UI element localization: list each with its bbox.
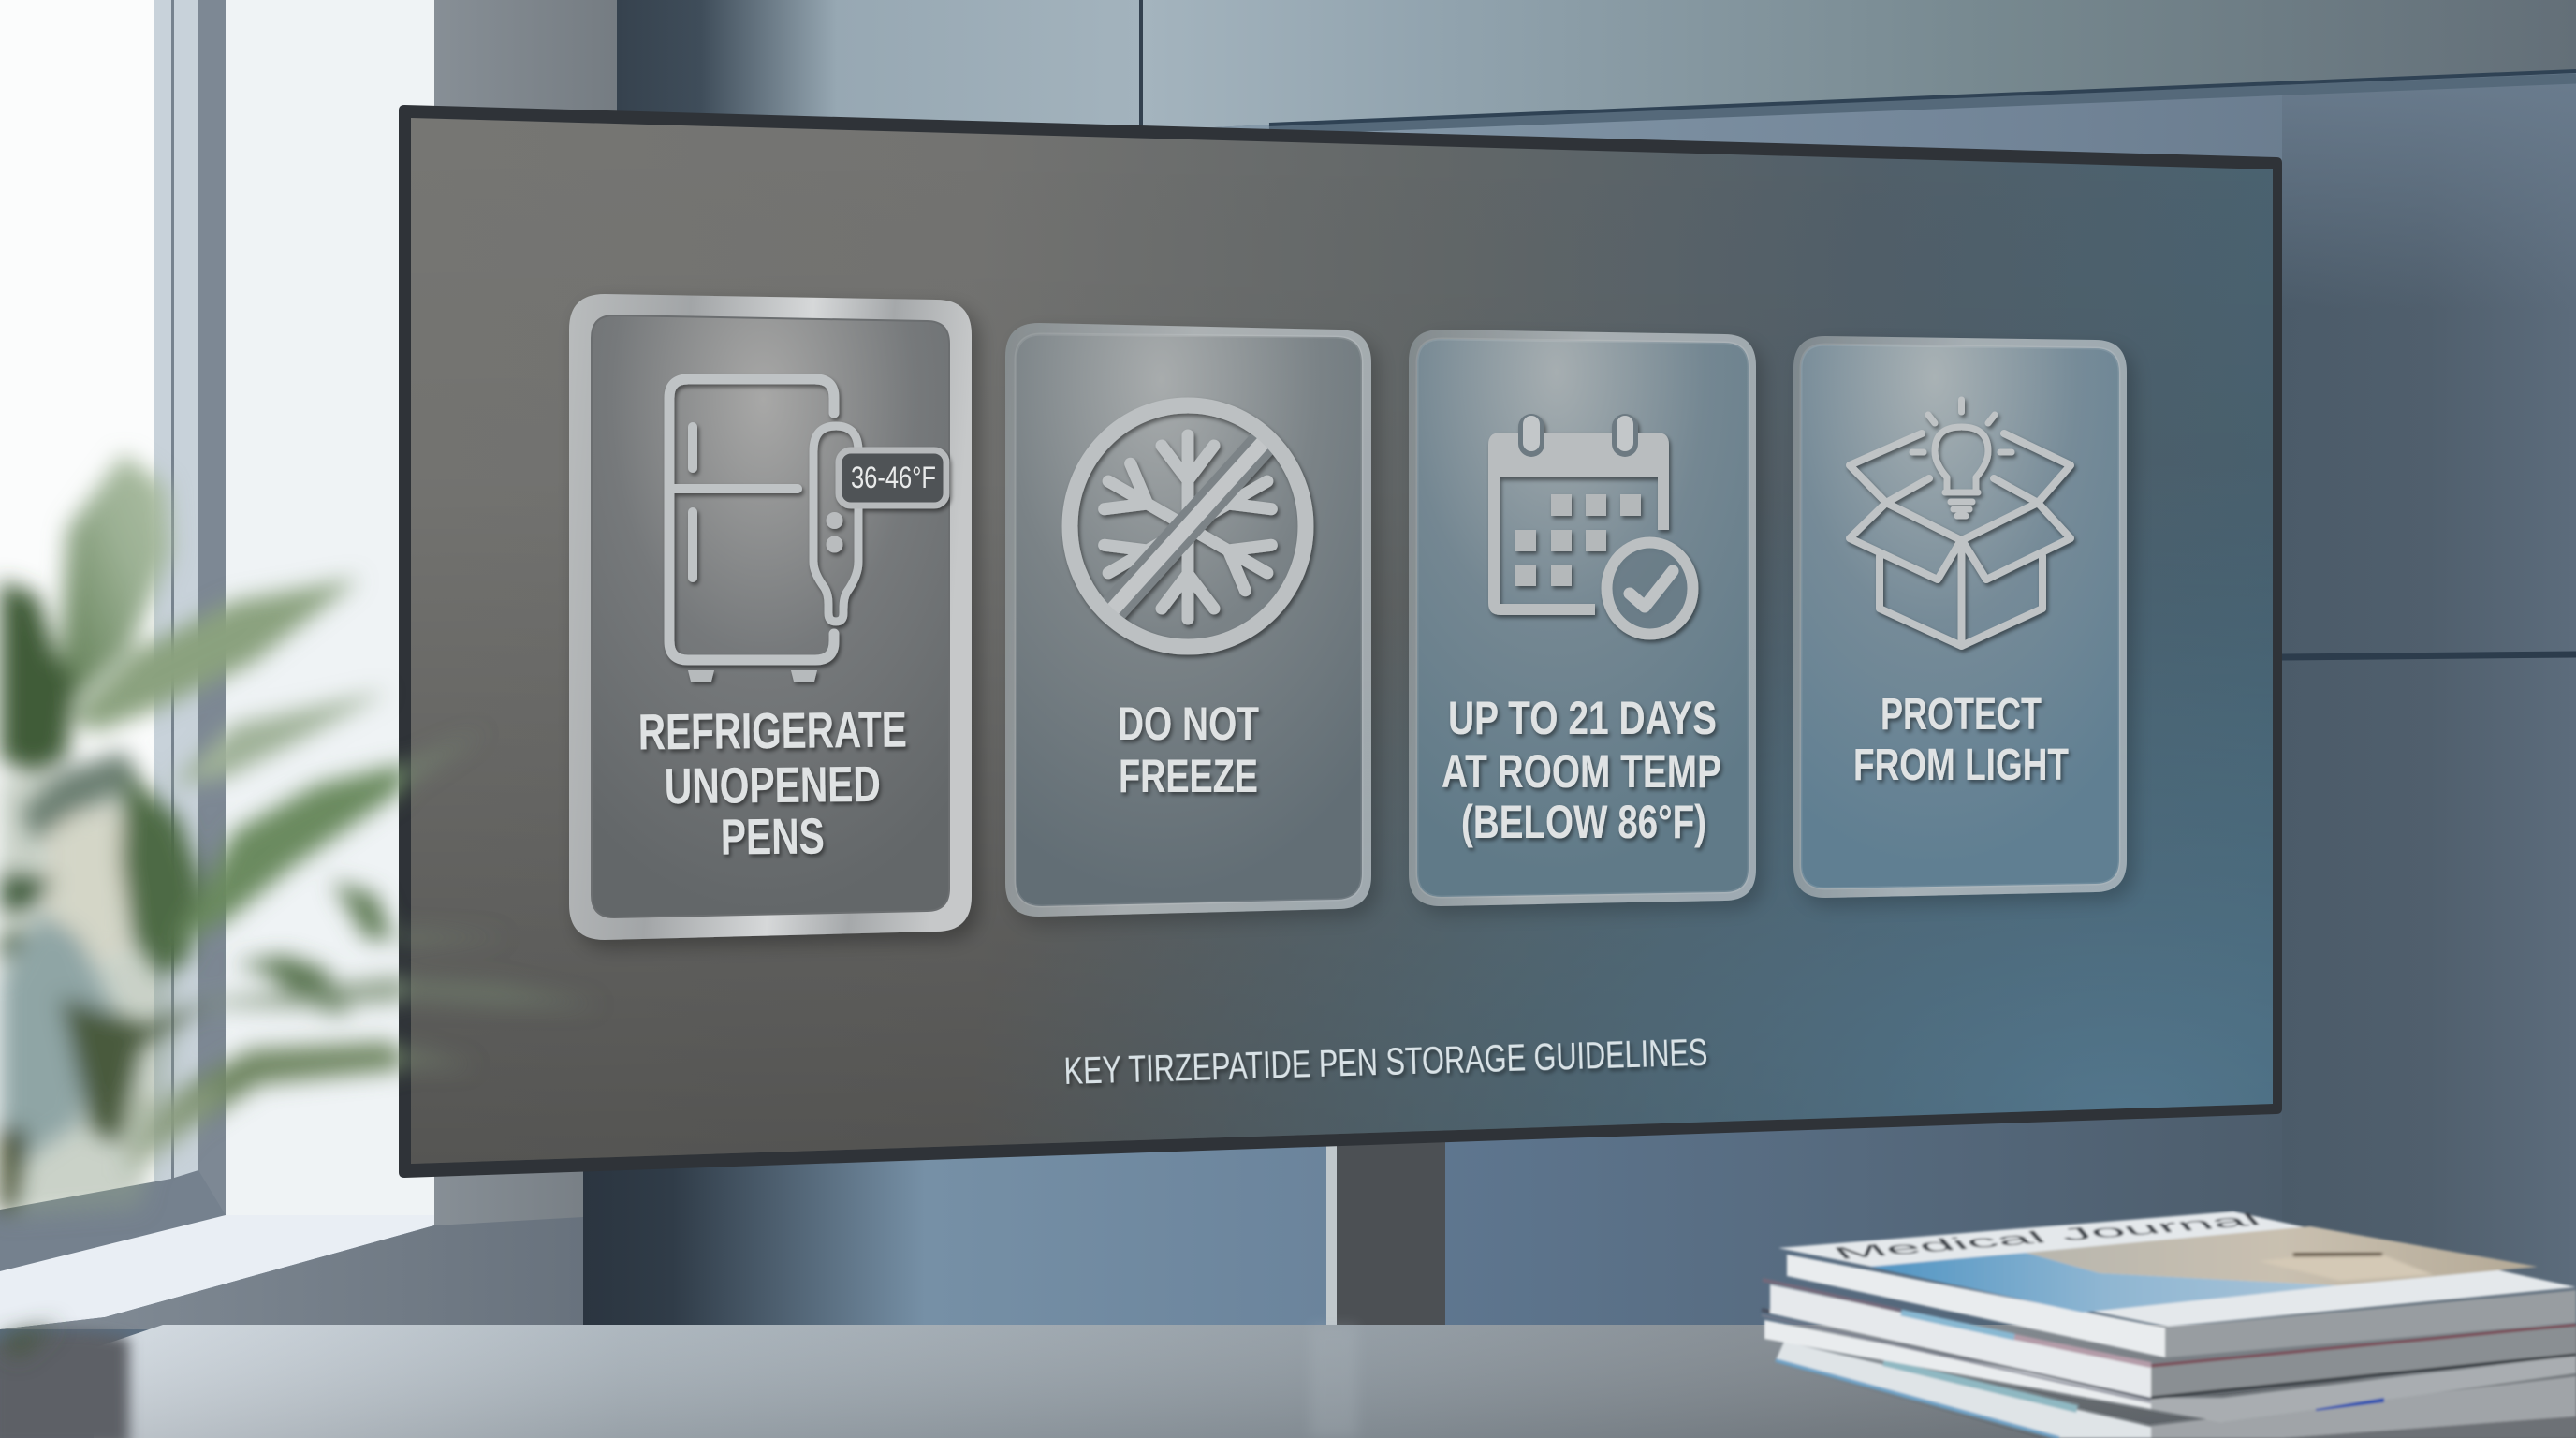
book 3 <box>1762 1310 2576 1422</box>
panel frame: glass edge <box>1409 330 1756 906</box>
monitor stand <box>1326 1133 1445 1329</box>
window and bright wall <box>0 0 583 1329</box>
cover photograph: hand detail <box>2259 1254 2434 1281</box>
desk <box>94 1325 2576 1438</box>
label: do not freeze <box>1118 697 1259 802</box>
book 1 cover <box>1778 1211 2576 1327</box>
thermometer display <box>839 450 946 506</box>
icon: refrigerator with thermometer <box>669 379 946 682</box>
label: up to 21 days at room temp: AT ROOM TEMP <box>1442 745 1721 798</box>
panel: up to 21 days at room temp <box>1409 330 1756 906</box>
footer caption: KEY TIRZEPATIDE PEN STORAGE GUIDELINES <box>1063 1031 1708 1093</box>
label: refrigerate unopened pens: UNOPENED <box>665 756 881 814</box>
label: up to 21 days at room temp: UP TO 21 DAYS <box>1448 692 1717 744</box>
wall panel seams <box>1141 0 2576 657</box>
label: protect from light <box>1853 690 2069 790</box>
panel face <box>592 315 949 917</box>
shadow under books <box>1774 1362 2576 1438</box>
book 2 <box>1763 1280 2576 1398</box>
label: protect from light: FROM LIGHT <box>1853 741 2069 790</box>
monitor screen <box>411 118 2273 1164</box>
plant leaves <box>0 454 602 1358</box>
label: protect from light: PROTECT <box>1881 690 2042 740</box>
icon: open box with light bulb <box>1850 400 2071 646</box>
icon: calendar with check mark <box>1488 414 1692 635</box>
panel frame: glass edge <box>1793 336 2127 898</box>
blurred plant foreground <box>0 454 602 1438</box>
cover photograph: beige area <box>2026 1226 2538 1285</box>
stack of medical journals <box>1762 1211 2576 1438</box>
panel face <box>1417 339 1749 897</box>
book 1 pages <box>2165 1290 2576 1357</box>
book 1 spine <box>1787 1255 2165 1357</box>
panel frame: glass edge <box>1005 323 1371 917</box>
book 4 <box>1776 1342 2576 1438</box>
label: do not freeze: FREEZE <box>1119 750 1258 802</box>
panel: do not freeze <box>1005 323 1371 917</box>
label: up to 21 days at room temp: (BELOW 86°F) <box>1461 796 1706 848</box>
monitor <box>399 105 2282 1178</box>
panel frame: brushed metal <box>569 294 972 940</box>
label: refrigerate unopened pens: PENS <box>721 808 825 866</box>
label: refrigerate unopened pens <box>638 702 907 866</box>
panel face <box>1016 334 1362 906</box>
label: do not freeze: DO NOT <box>1118 697 1259 750</box>
label: refrigerate unopened pens: REFRIGERATE <box>638 702 907 761</box>
panel: refrigerate unopened pens <box>569 294 972 940</box>
icon: crossed-out snowflake <box>1070 405 1306 647</box>
plant pot <box>0 1331 129 1438</box>
cover title: Medical Journal <box>1828 1211 2267 1263</box>
label: up to 21 days at room temp <box>1442 692 1721 848</box>
panel face <box>1801 345 2119 888</box>
panel: protect from light <box>1793 336 2127 898</box>
thermometer display: 36-46°F <box>851 461 936 494</box>
monitor bezel <box>399 105 2282 1178</box>
cover photograph: blue scrub area <box>1869 1253 2338 1313</box>
